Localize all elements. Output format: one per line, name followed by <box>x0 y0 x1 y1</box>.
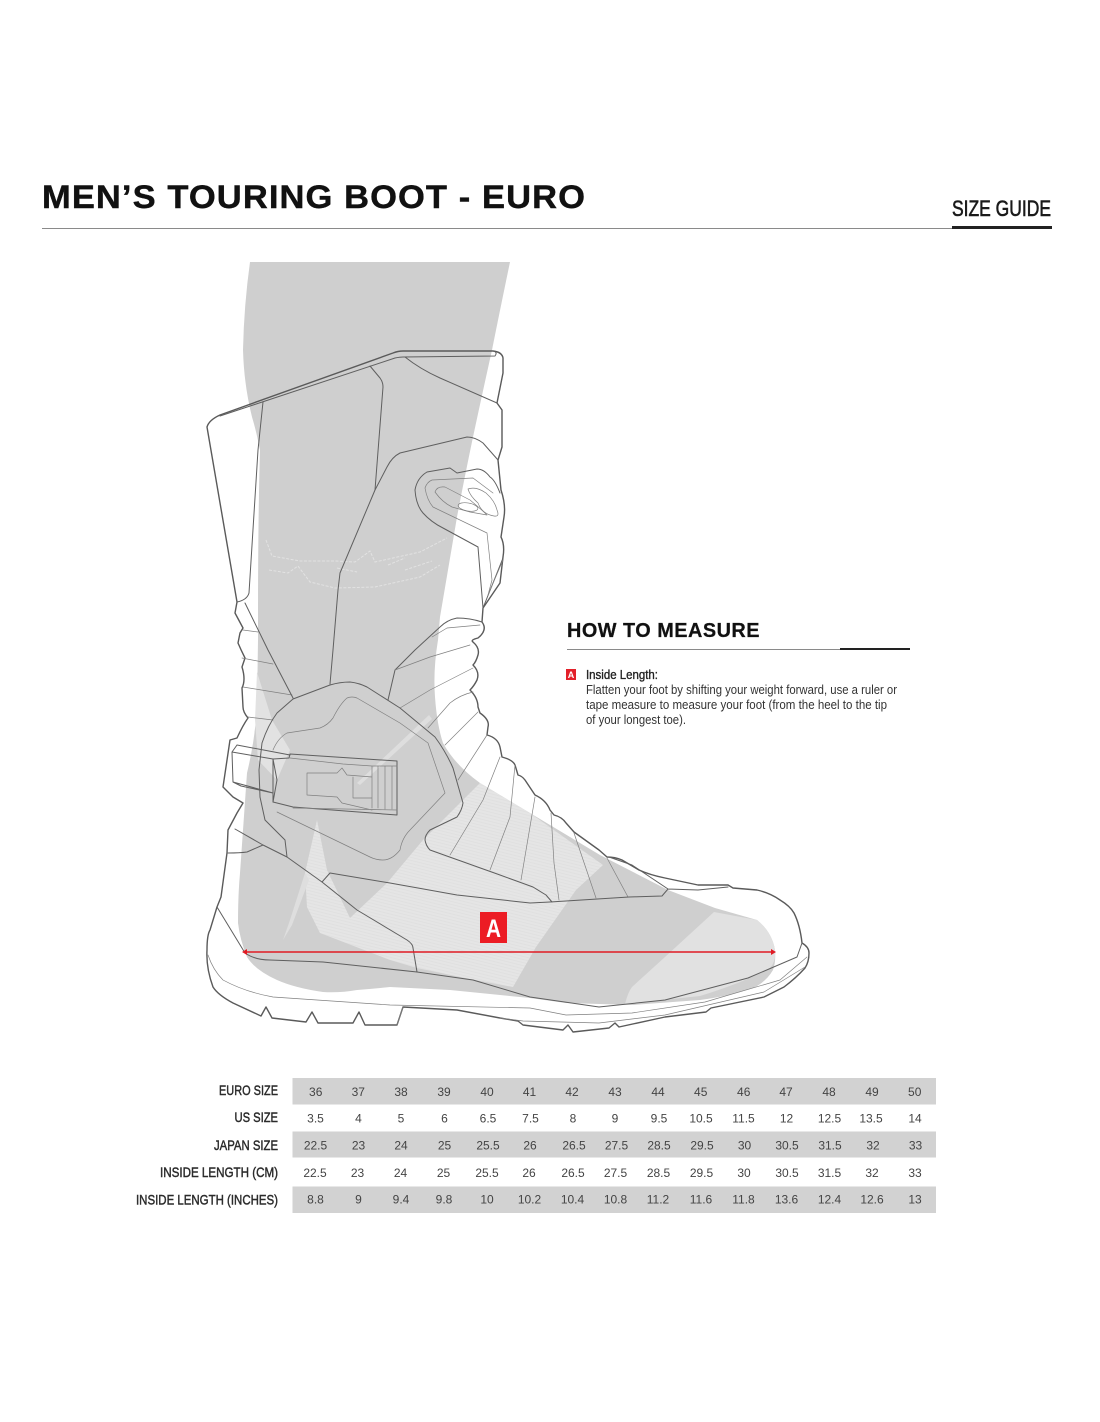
shin plate <box>330 437 498 684</box>
marker A: A <box>486 915 501 943</box>
row: japan size: 33 <box>909 1138 922 1152</box>
row: inside length inches: 11.6 <box>690 1192 713 1206</box>
marker A <box>480 912 507 943</box>
row: us size: 5 <box>398 1112 405 1126</box>
row: inside length inches: 10 <box>480 1192 494 1206</box>
sock toe <box>625 912 775 1004</box>
measurement arrow <box>242 949 776 955</box>
row: inside length cm: 27.5 <box>604 1166 628 1180</box>
row: japan size: 24 <box>394 1138 408 1152</box>
row: us size: 12.5 <box>818 1112 842 1126</box>
icon: A badge <box>566 669 576 680</box>
size guide label: SIZE GUIDE <box>952 196 1051 221</box>
row: inside length inches: 11.2 <box>647 1192 670 1206</box>
foot panels <box>322 857 728 903</box>
buckle strap <box>232 745 290 802</box>
boot illustration <box>207 262 809 1032</box>
size table <box>136 1078 936 1213</box>
row: euro size: 50 <box>908 1085 922 1099</box>
row: us size: 6 <box>441 1112 448 1126</box>
instructions <box>566 667 898 727</box>
row labels: JAPAN SIZE <box>214 1137 278 1153</box>
row: euro size: 46 <box>737 1085 751 1099</box>
leg silhouette <box>238 262 775 1005</box>
row: inside length cm: 29.5 <box>690 1166 714 1180</box>
row: japan size: 27.5 <box>605 1138 629 1152</box>
row: japan size: 30 <box>738 1138 751 1152</box>
row: japan size: 23 <box>352 1138 365 1152</box>
row: inside length inches: 9 <box>355 1192 362 1206</box>
row: inside length inches: 10.4 <box>561 1192 585 1206</box>
row: us size: 4 <box>355 1112 362 1126</box>
row labels: INSIDE LENGTH (INCHES) <box>136 1192 278 1208</box>
instruction body: Flatten your foot by shifting your weight forward, use a ruler or <box>586 682 898 697</box>
instruction body <box>586 682 898 727</box>
row: euro size: 38 <box>394 1085 408 1099</box>
row: inside length cm: 33 <box>908 1166 922 1180</box>
row: inside length cm: 25 <box>437 1166 450 1180</box>
row: euro size: 48 <box>822 1085 836 1099</box>
row: euro size: 47 <box>779 1085 793 1099</box>
row: euro size: 36 <box>309 1085 323 1099</box>
ankle plate <box>259 682 552 902</box>
row: us size: 13.5 <box>859 1112 883 1126</box>
instruction body: tape measure to measure your foot (from the heel to the tip <box>586 697 887 712</box>
row: inside length cm: 32 <box>865 1166 879 1180</box>
row: inside length cm: 28.5 <box>647 1166 671 1180</box>
row: inside length cm: 23 <box>351 1166 364 1180</box>
sock ankle highlights <box>255 672 290 780</box>
row: euro size: 49 <box>865 1085 879 1099</box>
row: inside length cm: 30 <box>737 1166 751 1180</box>
row: inside length inches: 10.2 <box>518 1192 542 1206</box>
row: euro size: 40 <box>480 1085 494 1099</box>
row: inside length cm <box>303 1166 922 1180</box>
row: us size: 7.5 <box>522 1112 539 1126</box>
row: inside length cm: 25.5 <box>475 1166 499 1180</box>
row: inside length inches: 9.8 <box>436 1192 453 1206</box>
row: japan size: 26 <box>523 1138 537 1152</box>
row: us size: 6.5 <box>480 1112 497 1126</box>
row: inside length cm: 26 <box>522 1166 536 1180</box>
table row bands <box>292 1078 936 1213</box>
boot outer outline <box>207 351 809 1032</box>
row: inside length cm: 30.5 <box>775 1166 799 1180</box>
row: japan size: 26.5 <box>562 1138 586 1152</box>
buckle <box>273 754 397 815</box>
row: euro size: 43 <box>608 1085 622 1099</box>
row: us size: 10.5 <box>689 1112 713 1126</box>
title: MEN’S TOURING BOOT - EURO <box>42 179 586 215</box>
heel counter and sole lines <box>208 907 807 1025</box>
row: us size: 11.5 <box>732 1112 755 1126</box>
row: us size: 9 <box>612 1112 619 1126</box>
collar <box>220 351 496 416</box>
row labels: EURO SIZE <box>219 1082 278 1098</box>
row: us size: 9.5 <box>651 1112 668 1126</box>
row: inside length cm: 26.5 <box>561 1166 585 1180</box>
row: euro size: 41 <box>523 1085 536 1099</box>
row: inside length inches: 13.6 <box>775 1192 799 1206</box>
row: japan size: 25.5 <box>476 1138 500 1152</box>
row: inside length cm: 31.5 <box>818 1166 842 1180</box>
row: us size: 8 <box>570 1112 577 1126</box>
how to measure rule <box>567 648 910 650</box>
row: inside length inches <box>307 1192 922 1206</box>
row: japan size: 31.5 <box>818 1138 842 1152</box>
row: japan size <box>304 1138 922 1152</box>
row: inside length inches: 12.6 <box>860 1192 884 1206</box>
row labels: US SIZE <box>234 1109 278 1125</box>
row: japan size: 29.5 <box>690 1138 714 1152</box>
row: euro size: 45 <box>694 1085 708 1099</box>
row: inside length inches: 13 <box>908 1192 922 1206</box>
row: inside length inches: 9.4 <box>393 1192 410 1206</box>
instruction heading: Inside Length: <box>586 667 658 682</box>
row: euro size <box>309 1085 922 1099</box>
icon: A badge: A <box>568 670 575 680</box>
row: inside length inches: 11.8 <box>732 1192 755 1206</box>
row: us size: 3.5 <box>307 1112 324 1126</box>
row: euro size: 42 <box>565 1085 579 1099</box>
row: us size <box>307 1112 922 1126</box>
row: japan size: 30.5 <box>775 1138 799 1152</box>
row: japan size: 28.5 <box>647 1138 671 1152</box>
row: inside length cm: 24 <box>394 1166 407 1180</box>
row: euro size: 44 <box>651 1085 665 1099</box>
header rule <box>42 226 1052 229</box>
row: inside length inches: 8.8 <box>307 1192 324 1206</box>
sock light area <box>305 783 603 987</box>
row: us size: 14 <box>908 1112 922 1126</box>
heel panels <box>228 797 417 972</box>
faint logo on leg <box>266 538 447 588</box>
logo plate <box>415 468 503 608</box>
front bellows <box>388 618 628 900</box>
row: euro size: 39 <box>437 1085 451 1099</box>
row: inside length inches: 12.4 <box>818 1192 842 1206</box>
row labels: INSIDE LENGTH (CM) <box>160 1164 278 1180</box>
how to measure heading: HOW TO MEASURE <box>567 619 760 642</box>
row: inside length cm: 22.5 <box>303 1166 327 1180</box>
left bellows <box>242 630 292 720</box>
instruction body: of your longest toe). <box>586 712 686 727</box>
row: japan size: 22.5 <box>304 1138 328 1152</box>
row labels <box>136 1082 278 1208</box>
row: euro size: 37 <box>352 1085 365 1099</box>
row: us size: 12 <box>780 1112 793 1126</box>
row: japan size: 32 <box>866 1138 880 1152</box>
row: japan size: 25 <box>438 1138 451 1152</box>
row: inside length inches: 10.8 <box>604 1192 628 1206</box>
